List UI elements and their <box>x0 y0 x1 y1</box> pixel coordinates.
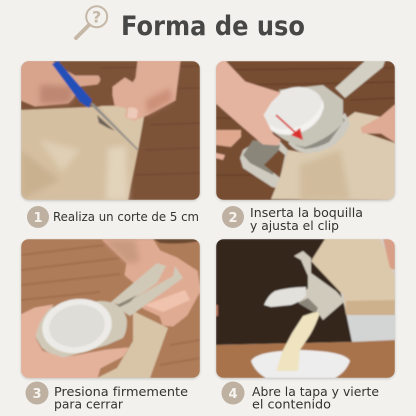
clip lower loop <box>239 140 289 189</box>
step 1 caption: Realiza un corte de 5 cm <box>53 209 199 224</box>
step 2 number badge <box>222 206 244 228</box>
step 3 number badge <box>26 382 48 404</box>
icon: magnifying glass with question mark <box>76 6 107 38</box>
step 2 caption: y ajusta el clip <box>250 218 339 233</box>
front hand <box>21 305 128 378</box>
back hand <box>103 240 200 326</box>
table <box>216 340 395 378</box>
handle <box>335 61 385 98</box>
step 3 number badge: 3 <box>32 387 42 402</box>
step 3 caption: Presiona firmemente <box>54 384 188 399</box>
apron <box>216 239 352 345</box>
cap body <box>274 111 343 148</box>
bag <box>271 112 395 200</box>
step 2 caption: Inserta la boquilla <box>250 205 363 220</box>
step 4 number badge <box>222 382 244 404</box>
lid <box>42 298 112 354</box>
panel: step 1 photo <box>21 61 200 201</box>
clip collar ring <box>288 113 350 153</box>
step 4 number badge: 4 <box>228 387 238 402</box>
red arrow <box>276 115 298 135</box>
open lid <box>264 287 306 307</box>
clip base <box>35 301 127 358</box>
step 3 caption <box>54 384 188 412</box>
bag <box>311 239 395 315</box>
right hand <box>113 61 180 120</box>
step 1 number badge: 1 <box>33 211 43 226</box>
left hand and thumb <box>21 61 100 106</box>
bag <box>97 311 168 378</box>
panel: step 3 photo <box>21 239 200 379</box>
step 4 caption: el contenido <box>252 396 331 412</box>
step 2 caption <box>250 205 363 233</box>
white lid <box>262 86 323 136</box>
hand right <box>361 105 395 142</box>
spout and clip <box>294 251 345 320</box>
bag <box>21 105 146 200</box>
step 4 caption: Abre la tapa y vierte <box>252 384 379 399</box>
icon: magnifying glass with question mark: ? <box>92 8 101 26</box>
clip arms <box>110 263 166 305</box>
clip back plate <box>278 84 344 104</box>
powder stream <box>276 310 321 371</box>
panel: step 4 photo <box>216 239 395 379</box>
step 2 number badge: 2 <box>228 211 238 226</box>
step 1 number badge <box>27 206 49 228</box>
step 4 caption <box>252 384 379 412</box>
step 3 caption: para cerrar <box>54 396 124 412</box>
title: Forma de uso <box>121 11 305 42</box>
bowl <box>251 350 350 378</box>
panel: step 2 photo <box>216 61 395 201</box>
scissors <box>52 61 92 108</box>
hand left <box>216 61 280 145</box>
